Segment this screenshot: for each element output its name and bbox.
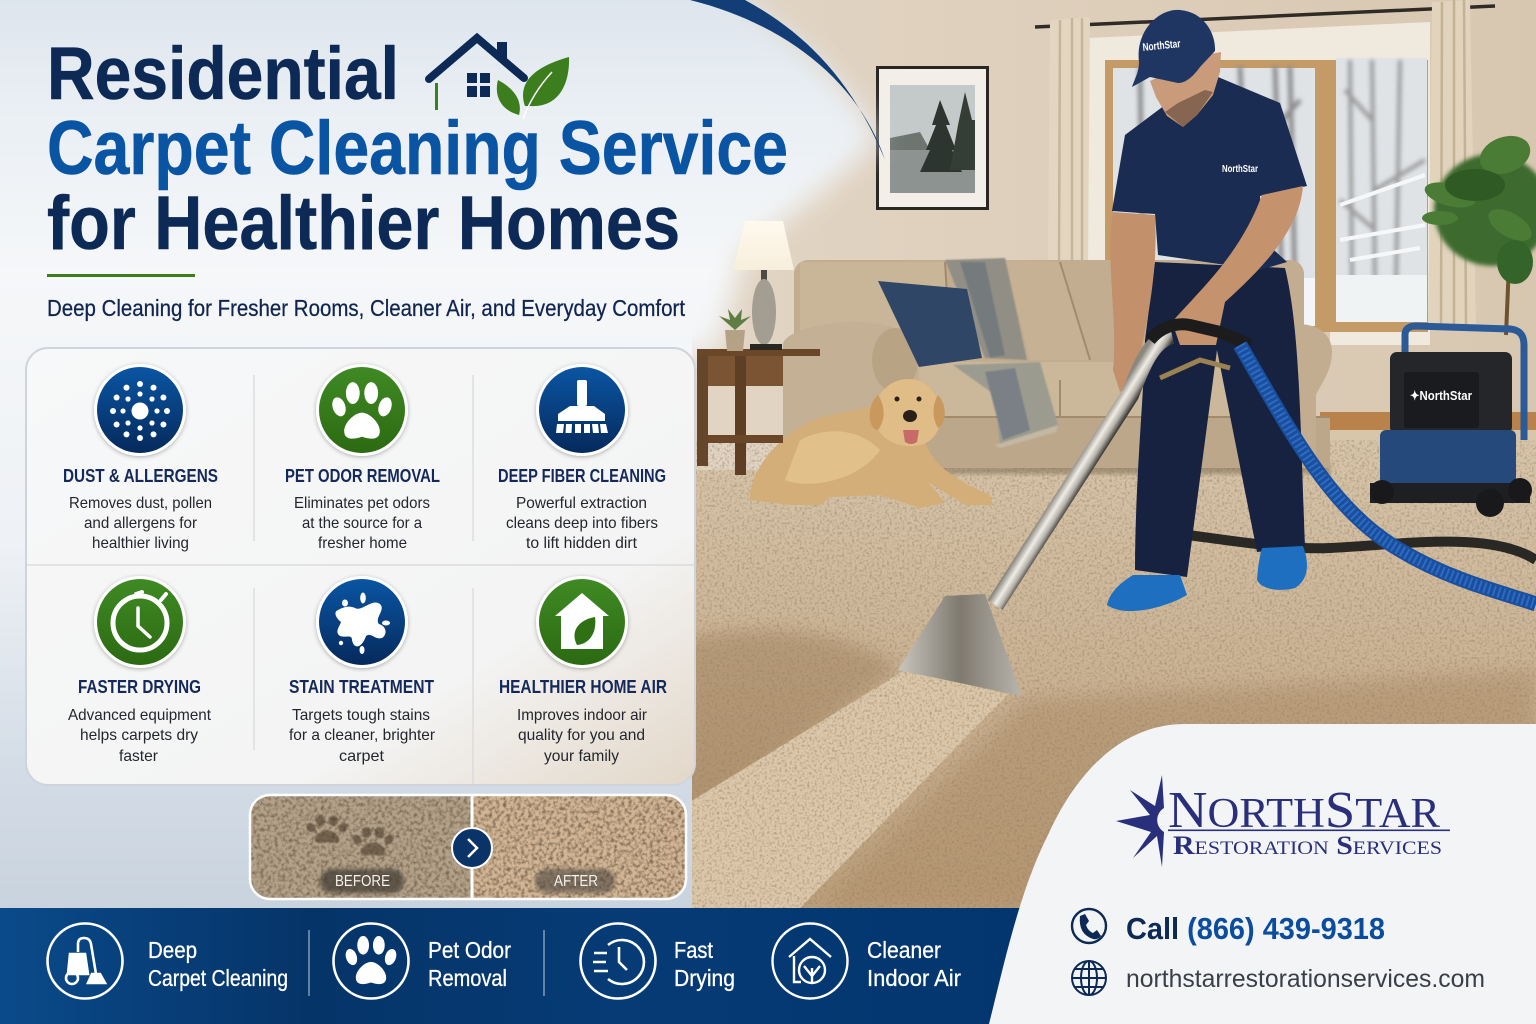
carpet floor: [680, 430, 1536, 908]
label: Removal: [428, 965, 507, 991]
icon: arrow: [452, 828, 492, 868]
label: [674, 937, 735, 991]
icon: fast clock: [580, 924, 656, 998]
heading: HEALTHIER HOME AIR: [499, 677, 667, 697]
description: carpet: [339, 748, 385, 765]
label: Cleaner: [867, 937, 941, 963]
label: Indoor Air: [867, 965, 961, 991]
title: Residential: [47, 32, 399, 115]
green accent rule: [47, 274, 195, 277]
description: [517, 707, 648, 765]
description: fresher home: [318, 535, 407, 552]
label: Pet Odor: [428, 937, 511, 963]
subtitle: Deep Cleaning for Fresher Rooms, Cleaner Air, and Everyday Comfort: [47, 295, 686, 321]
description: [506, 495, 658, 552]
throw blanket: [945, 258, 1058, 448]
description: Eliminates pet odors: [294, 495, 430, 512]
benefit: fast drying: [580, 924, 735, 998]
description: to lift hidden dirt: [526, 535, 638, 552]
technician: [1107, 10, 1307, 611]
extractor machine: ✦NorthStar: [1410, 388, 1472, 403]
left arm: [1110, 212, 1156, 392]
label: after: AFTER: [554, 873, 598, 890]
logo star: [1116, 775, 1164, 867]
label: [428, 937, 511, 991]
description: Improves indoor air: [517, 707, 648, 724]
website: northstarrestorationservices.com: [1126, 965, 1485, 993]
feature: faster drying: [68, 576, 212, 765]
left background panel: [0, 0, 960, 908]
icon: paw: [316, 364, 408, 456]
baseboard: [1320, 412, 1536, 430]
feature: dust and allergens: [63, 364, 218, 552]
description: [68, 707, 212, 765]
heading: STAIN TREATMENT: [289, 677, 434, 697]
houseplant: [1422, 129, 1536, 335]
bottom benefits bar: [0, 908, 1030, 1024]
heading: FASTER DRYING: [78, 677, 201, 697]
cleaning wand and nozzle: [898, 324, 1250, 696]
title: for Healthier Homes: [47, 181, 680, 266]
benefit: cleaner indoor air: [772, 924, 961, 998]
icon: house with leaf outline: [772, 924, 848, 998]
icon: brush: [536, 364, 628, 456]
label: Fast: [674, 937, 714, 963]
small plant: [719, 309, 751, 351]
description: Targets tough stains: [292, 707, 430, 724]
description: Removes dust, pollen: [69, 495, 212, 512]
description: [69, 495, 212, 552]
title: [47, 32, 788, 266]
window: [1088, 22, 1430, 345]
description: helps carpets dry: [80, 727, 198, 744]
icon: globe: [1072, 961, 1106, 995]
before and after carpet comparison: [250, 795, 686, 899]
feature: deep fiber cleaning: [498, 364, 666, 552]
description: [294, 495, 430, 552]
description: Powerful extraction: [516, 495, 647, 512]
icon: phone: [1072, 909, 1106, 943]
description: for a cleaner, brighter: [289, 727, 436, 744]
icon: stopwatch: [94, 576, 186, 668]
logo name: NORTHSTAR: [1168, 782, 1440, 839]
trousers: [1135, 262, 1305, 577]
description: faster: [119, 748, 159, 765]
heading: DUST & ALLERGENS: [63, 466, 218, 486]
feature: pet odor removal: [285, 364, 440, 552]
framed picture: [876, 66, 989, 210]
throw pillow: [878, 281, 982, 367]
description: Advanced equipment: [68, 707, 212, 724]
icon: dust: [94, 364, 186, 456]
lamp: [733, 221, 794, 350]
benefit: pet odor removal: [334, 924, 511, 998]
description: your family: [544, 748, 619, 765]
icon: house and leaf: [429, 38, 569, 119]
description: at the source for a: [302, 515, 422, 532]
panel: service features: [26, 348, 695, 785]
feature: healthier home air: [499, 576, 667, 765]
logo tagline: RESTORATION SERVICES: [1173, 831, 1442, 860]
label: Drying: [674, 965, 735, 991]
sofa: [783, 260, 1332, 468]
icon: vacuum: [48, 924, 122, 998]
cap: [1132, 10, 1215, 87]
golden retriever dog: [750, 379, 993, 508]
curtain rod: [1035, 6, 1495, 27]
curtains: [1048, 0, 1476, 325]
panel: logo and contact: [989, 724, 1536, 1024]
wall: [680, 0, 1536, 470]
phone number: Call (866) 439-9318: [1126, 911, 1385, 946]
heading: DEEP FIBER CLEANING: [498, 466, 666, 486]
technician: NorthStar: [1142, 38, 1182, 54]
label: before: BEFORE: [335, 873, 390, 890]
icon: paw: [334, 924, 408, 998]
description: [289, 707, 436, 765]
black hose: [1188, 535, 1536, 560]
room photo: technician cleaning carpet: [680, 0, 1536, 908]
right arm: [1172, 186, 1303, 345]
title: Carpet Cleaning Service: [47, 106, 788, 191]
blue shoe covers: [1107, 546, 1307, 611]
face: [1150, 52, 1221, 127]
logo: NorthStar Restoration Services: [1116, 775, 1450, 867]
side table: [697, 349, 820, 475]
label: [867, 937, 961, 991]
icon: splat: [316, 576, 408, 668]
description: quality for you and: [518, 727, 645, 744]
technician: NorthStar: [1222, 164, 1258, 175]
icon: house with leaf: [536, 576, 628, 668]
description: cleans deep into fibers: [506, 515, 658, 532]
description: healthier living: [92, 535, 189, 552]
polo shirt: [1112, 77, 1307, 270]
feature: stain treatment: [289, 576, 436, 765]
extractor machine: [1370, 326, 1532, 517]
heading: PET ODOR REMOVAL: [285, 466, 440, 486]
label: Carpet Cleaning: [148, 965, 288, 991]
label: Deep: [148, 937, 197, 963]
blue hose: [1240, 345, 1536, 604]
description: and allergens for: [84, 515, 198, 532]
benefit: deep carpet cleaning: [48, 924, 288, 998]
label: [148, 937, 288, 991]
